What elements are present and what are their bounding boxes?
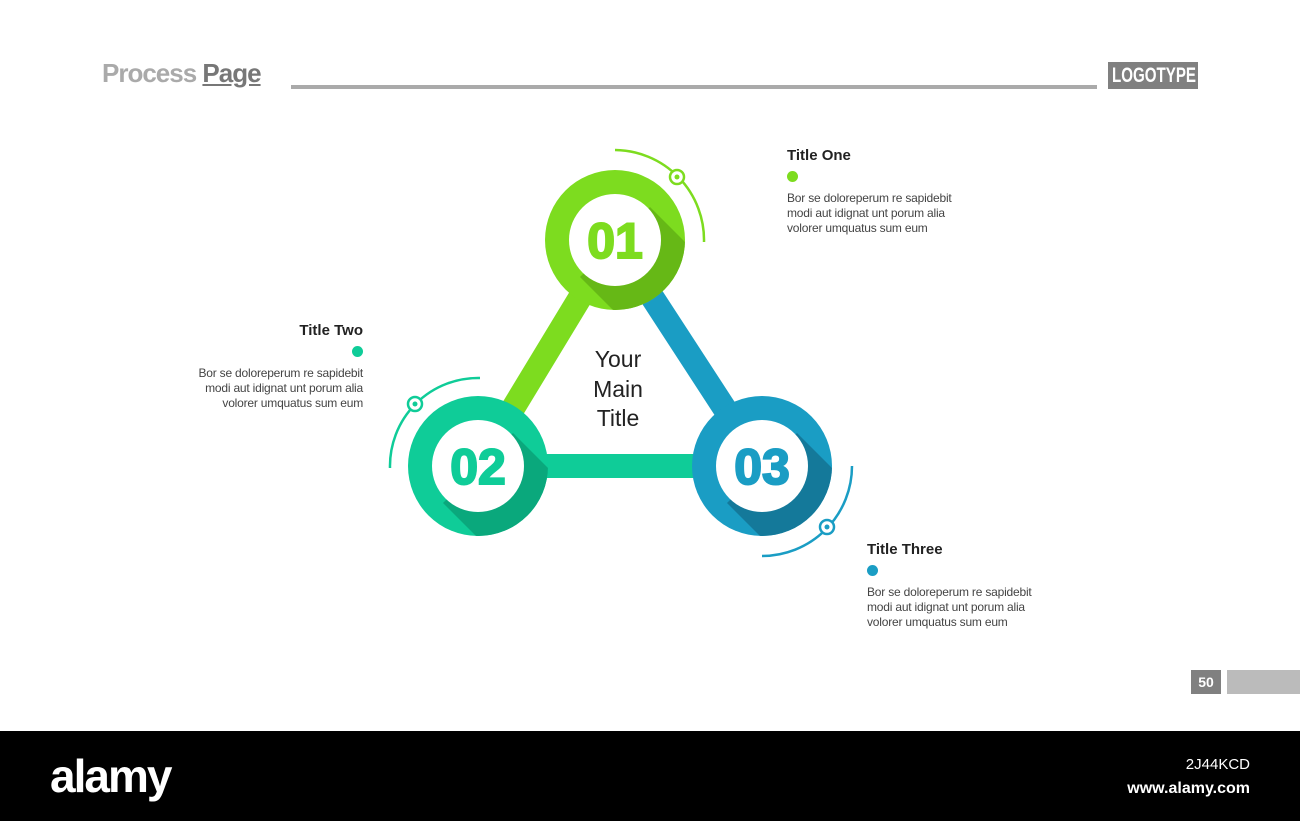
page number: 50 <box>1198 674 1214 690</box>
circle 03 <box>692 396 854 558</box>
text: title three: Title Three <box>867 541 943 558</box>
logotype: LOGOTYPE <box>1112 64 1196 87</box>
text: title one: volorer umquatus sum eum <box>787 221 928 235</box>
circle 03: 03 <box>734 439 790 495</box>
text: title three: volorer umquatus sum eum <box>867 615 1008 629</box>
text: title two: Bor se doloreperum re sapidebit <box>198 366 363 380</box>
text: title three <box>867 541 1032 629</box>
circle 02: 02 <box>450 439 506 495</box>
header title: Process Page <box>102 58 261 88</box>
footer bar: 2J44KCD <box>1186 756 1250 773</box>
main title: Main <box>593 376 643 402</box>
main title: Title <box>597 405 639 431</box>
header rule <box>291 85 1097 89</box>
page number <box>1191 670 1221 694</box>
connector 01-02 <box>478 240 615 466</box>
circle 02 <box>388 376 548 536</box>
text: title two <box>198 322 364 410</box>
diagram <box>388 148 854 558</box>
footer bar: www.alamy.com <box>1127 780 1250 797</box>
circle 01: 01 <box>587 213 643 269</box>
text: title two: Title Two <box>299 322 363 339</box>
text: title two: volorer umquatus sum eum <box>222 396 363 410</box>
text: title three: modi aut idignat unt porum alia <box>867 600 1025 614</box>
main title <box>593 346 643 431</box>
connector 02-03 <box>478 454 762 478</box>
text: title one: Title One <box>787 147 851 164</box>
text: title one: Bor se doloreperum re sapidebit <box>787 191 952 205</box>
circle 01 <box>545 148 706 310</box>
main title: Your <box>595 346 642 372</box>
text: title one <box>787 147 952 235</box>
text: title three: Bor se doloreperum re sapidebit <box>867 585 1032 599</box>
footer bar <box>0 731 1300 821</box>
connector 01-03 <box>615 240 762 466</box>
text: title one: modi aut idignat unt porum alia <box>787 206 945 220</box>
footer bar: alamy <box>50 750 170 802</box>
text: title two: modi aut idignat unt porum alia <box>205 381 363 395</box>
